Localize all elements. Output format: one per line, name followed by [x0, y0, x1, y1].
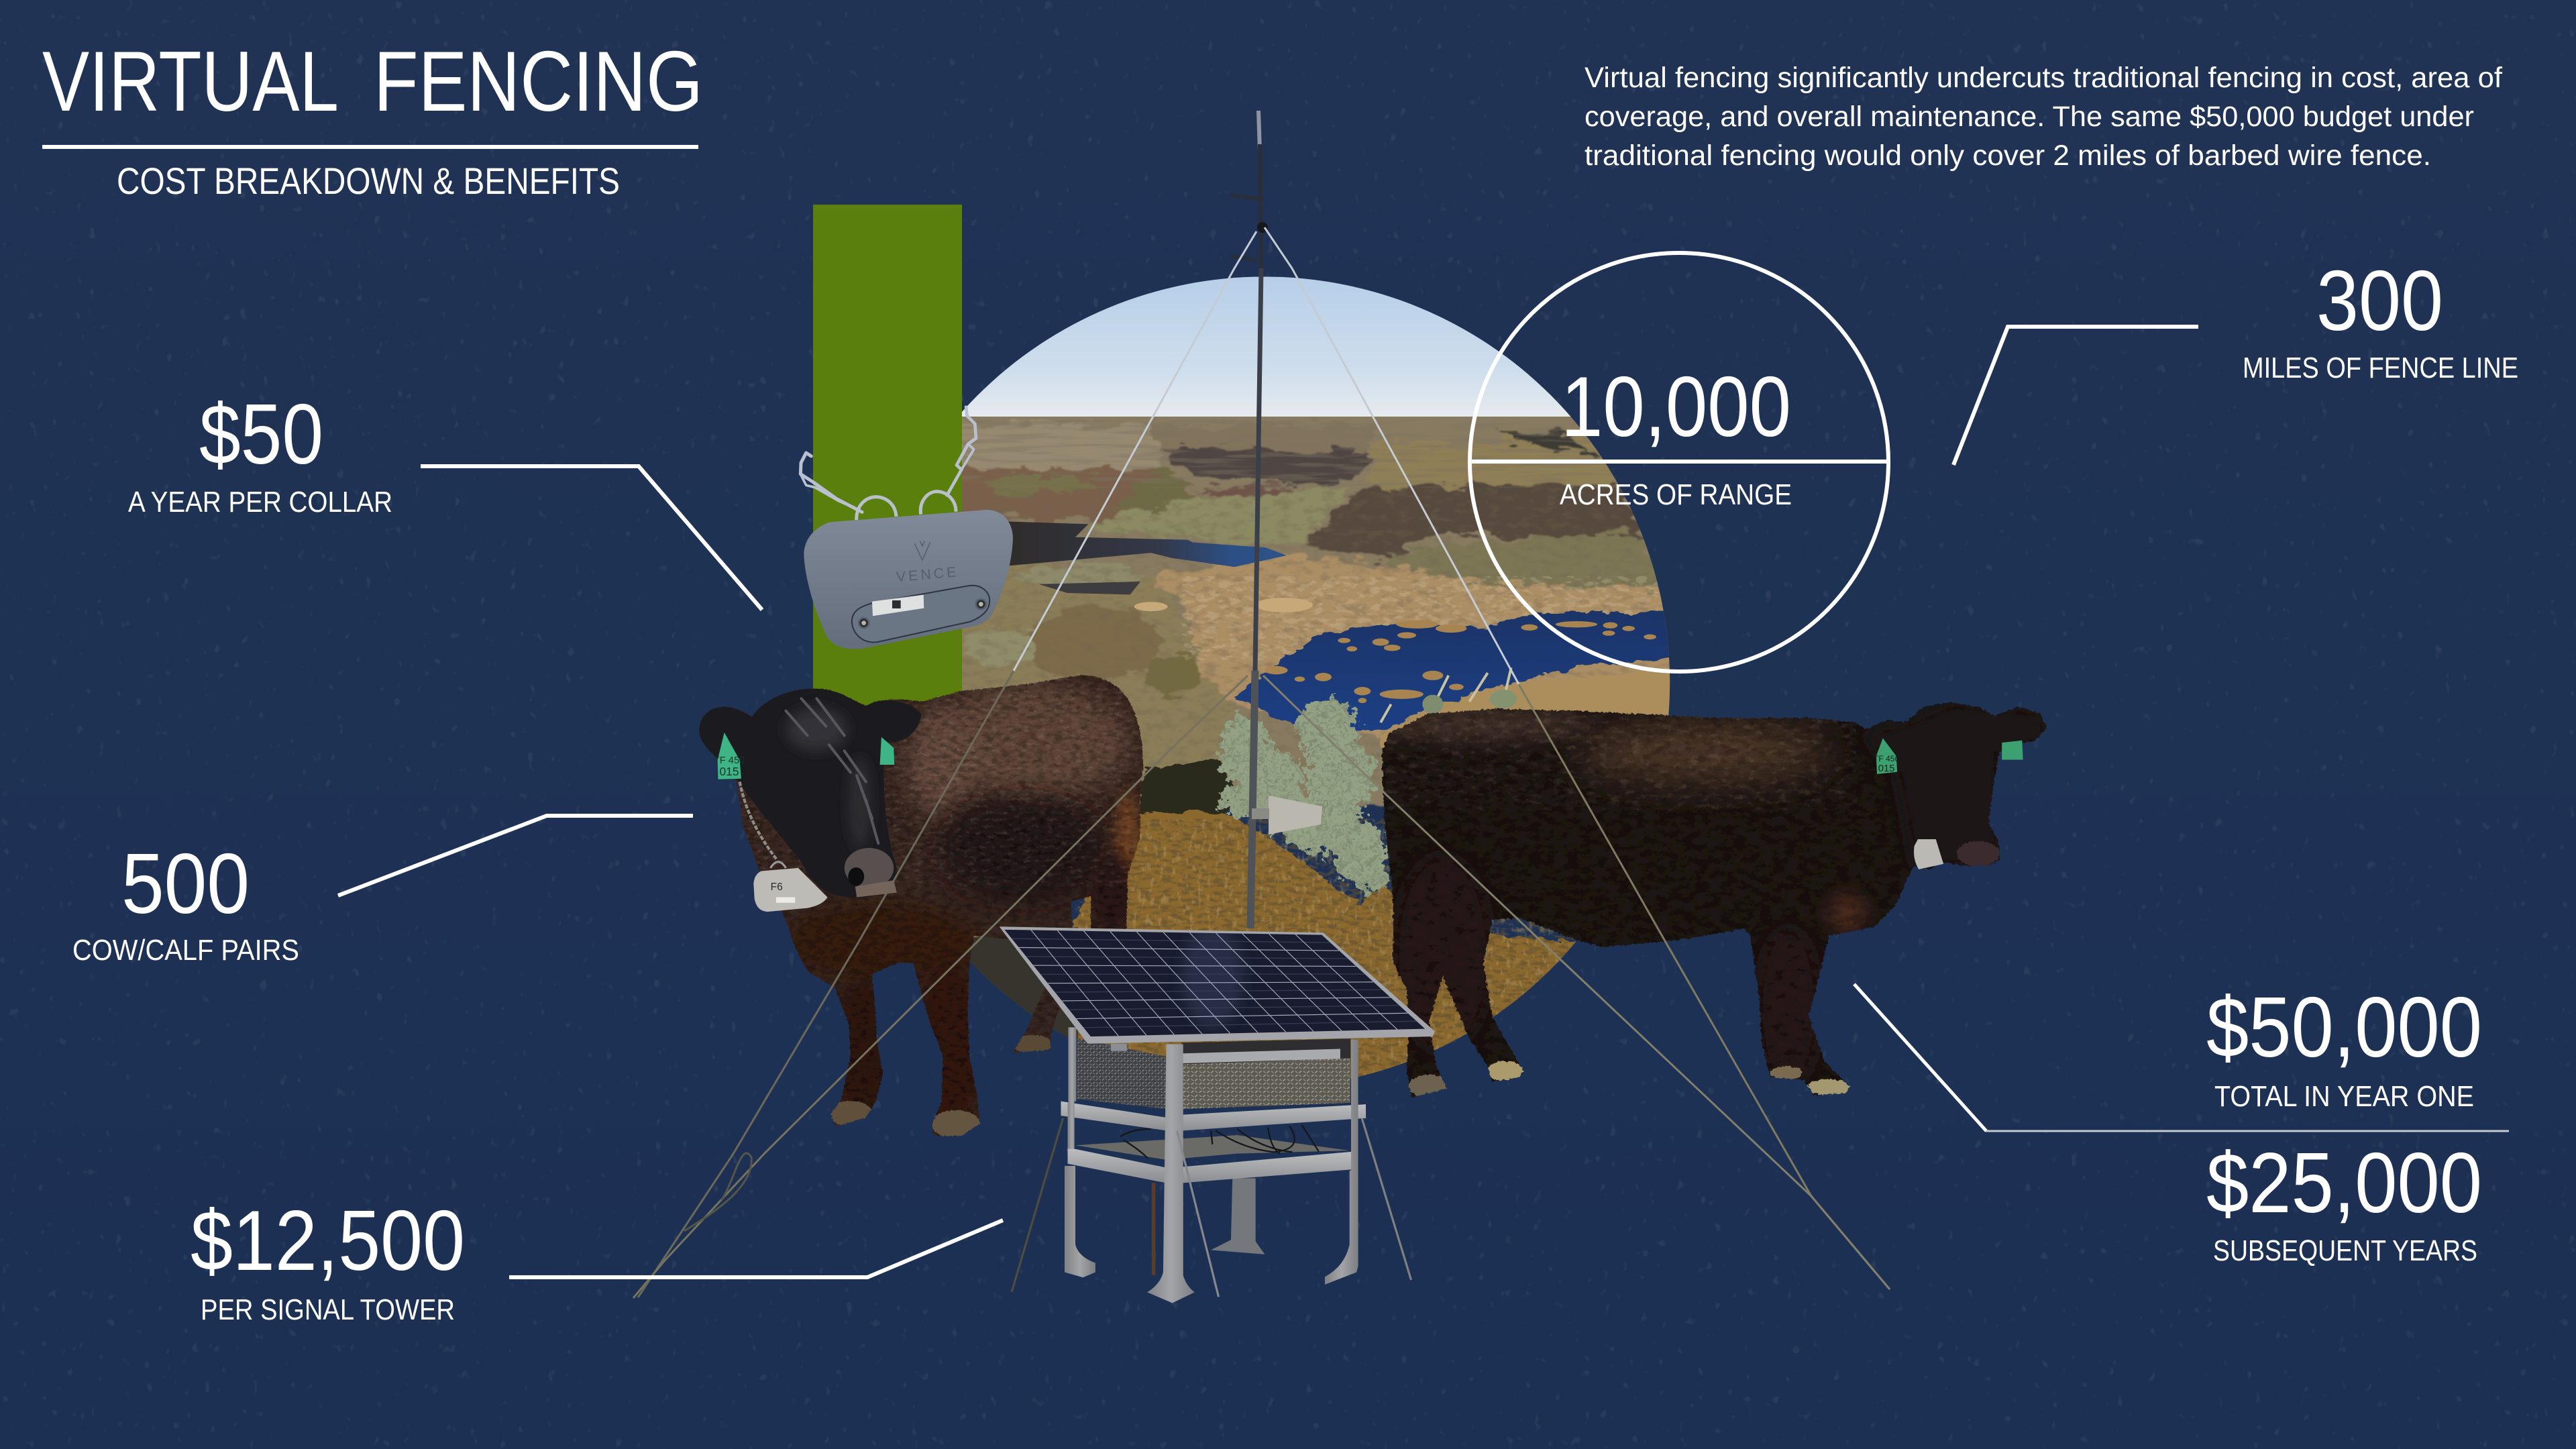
- ear tags: 015: [719, 765, 739, 778]
- cow hooves: [1409, 1061, 1851, 1098]
- intro paragraph: coverage, and overall maintenance. The same $50,000 budget under: [1585, 101, 2474, 133]
- intro paragraph: Virtual fencing significantly undercuts traditional fencing in cost, area of: [1585, 62, 2503, 94]
- marsh tufts: [1182, 576, 1673, 660]
- title: VIRTUAL: [42, 34, 339, 129]
- cow body: [684, 671, 1167, 1154]
- neck chain: [740, 782, 777, 859]
- canyon strata texture: [958, 420, 1673, 488]
- antenna: [1252, 796, 1322, 835]
- side pond: [1038, 582, 1140, 594]
- title: FENCING: [374, 34, 703, 129]
- stat: $25,000 subsequent years: SUBSEQUENT YEARS: [2213, 1234, 2477, 1267]
- upper rails: [1061, 1102, 1366, 1131]
- foreground grass: [963, 811, 1694, 1104]
- sagebrush: [1208, 667, 1517, 900]
- mast: [1230, 111, 1268, 928]
- logo: [896, 541, 959, 585]
- ear tags: TF 450: [1874, 754, 1899, 763]
- collar body: [804, 510, 1013, 649]
- shadow under bush: [1140, 759, 1234, 822]
- leader: collar: [421, 466, 762, 610]
- stat: $12,500 per signal tower: PER SIGNAL TOWER: [201, 1293, 455, 1326]
- stat: 300 miles of fence line: MILES OF FENCE LINE: [2243, 352, 2518, 384]
- leader: total cost: [1854, 984, 2509, 1131]
- label: [872, 595, 924, 616]
- upper lake: [1008, 521, 1287, 567]
- guy wire: left lower: [633, 676, 1248, 1298]
- legs: [1065, 1027, 1358, 1303]
- collar device with chain: [800, 407, 1013, 649]
- cow head: [1860, 702, 2047, 869]
- leader: tower: [509, 1220, 1003, 1277]
- guy wire: left upper: [638, 231, 1256, 1297]
- green bar: [813, 205, 962, 721]
- leader: cows: [338, 816, 693, 896]
- stat: 500 cow/calf pairs: 500: [121, 836, 250, 931]
- sky: [962, 276, 1571, 417]
- intro paragraph: traditional fencing would only cover 2 miles of barbed wire fence.: [1585, 140, 2431, 172]
- cow head: [699, 689, 922, 898]
- circle callout: 10,000 acres of range: 10,000: [1561, 359, 1791, 454]
- logo: VENCE: [896, 564, 959, 585]
- signal tower: [633, 111, 1890, 1298]
- intro paragraph: [1585, 62, 2503, 172]
- lower rails: [1068, 1147, 1358, 1183]
- D rings: [857, 492, 956, 520]
- screws: [859, 599, 986, 628]
- ear tags: TF 450: [714, 755, 745, 766]
- wires: [1120, 1125, 1319, 1159]
- canyon land: [962, 386, 1670, 808]
- stand back legs: [1152, 1178, 1265, 1275]
- landscape photo circle: [859, 268, 1694, 1104]
- stat: $50,000 total in year one: $50,000: [2206, 979, 2482, 1075]
- stat: $50 a year per collar: [128, 386, 392, 519]
- turnbuckle cables: [1012, 1118, 1411, 1297]
- stat: 300 miles of fence line: 300: [2316, 253, 2443, 348]
- lower back frame: [1075, 1135, 1350, 1160]
- guy wire: right inner: [1263, 676, 1890, 1289]
- cow: left: [684, 671, 1167, 1154]
- subtitle: COST BREAKDOWN & BENEFITS: [117, 160, 620, 202]
- solar panel: [1000, 924, 1435, 1044]
- cow muzzle: [1957, 841, 2000, 866]
- stat: $50,000 total in year one: TOTAL IN YEAR ONE: [2214, 1080, 2474, 1113]
- collar on cow: F6: [771, 881, 783, 893]
- stat: 500 cow/calf pairs: COW/CALF PAIRS: [72, 934, 299, 967]
- far shore: [1381, 667, 1694, 749]
- marsh patches: [1134, 598, 1313, 612]
- cow hooves: [829, 1035, 1053, 1138]
- ear tags: 015: [1878, 763, 1894, 774]
- stat: $50,000 total in year one: [2206, 979, 2482, 1113]
- circle callout: 10,000 acres of range: ACRES OF RANGE: [1560, 478, 1792, 511]
- cow: right: [1362, 684, 2066, 1134]
- land mottling: [958, 488, 1673, 780]
- chain: [800, 407, 976, 512]
- leader: fence line: [1953, 327, 2198, 465]
- title: [42, 34, 703, 129]
- stat: 500 cow/calf pairs: [72, 836, 299, 967]
- circle callout: 10,000 acres of range: [1470, 253, 1888, 672]
- back plate: [852, 586, 989, 642]
- guy wire: right outer: [1265, 227, 1890, 1289]
- stat: $12,500 per signal tower: $12,500: [191, 1193, 465, 1288]
- collar on cow: [753, 862, 828, 912]
- ear tags: [1874, 738, 2023, 774]
- lower lake and islands: [1234, 613, 1694, 733]
- stat: $12,500 per signal tower: [191, 1193, 465, 1326]
- stat: $50 a year per collar: A YEAR PER COLLAR: [128, 486, 392, 519]
- cow body: [1362, 684, 2066, 1134]
- solar panel station: [1000, 924, 1435, 1303]
- dark ground patch behind panel: [958, 927, 1078, 1051]
- stat: $25,000 subsequent years: [2206, 1135, 2482, 1267]
- stat: 300 miles of fence line: [2243, 253, 2518, 384]
- collar on cow: [1914, 839, 1943, 869]
- stat: $25,000 subsequent years: $25,000: [2206, 1135, 2482, 1230]
- ear tags: [714, 733, 894, 780]
- stat: $50 a year per collar: $50: [199, 386, 323, 482]
- mesh box: [1077, 1038, 1350, 1109]
